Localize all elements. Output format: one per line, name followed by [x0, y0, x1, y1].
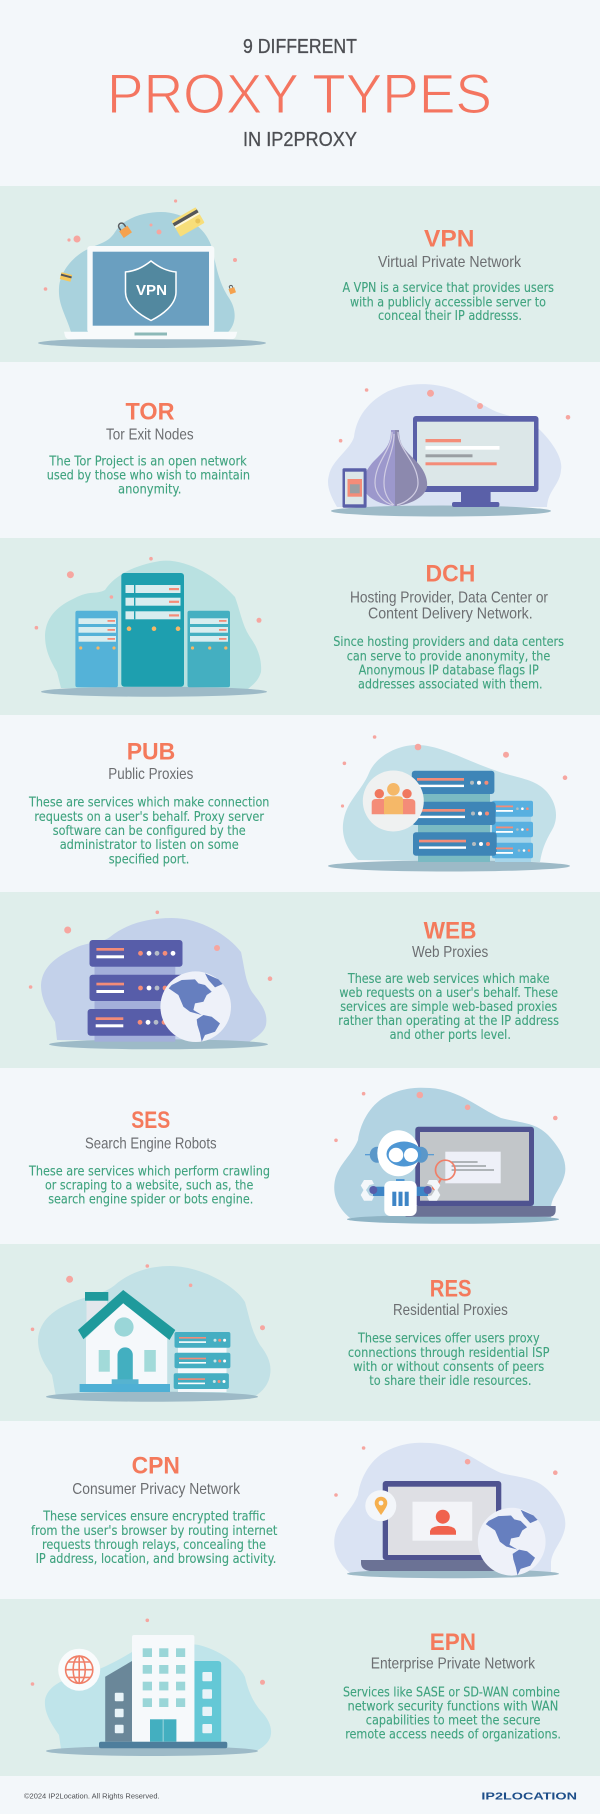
- text: TOR: Tor Exit Nodes: [106, 426, 194, 443]
- illustration: onion and monitor: [328, 384, 570, 516]
- text: CPN: Consumer Privacy Network: [72, 1481, 241, 1498]
- text: CPN: from the user's browser by routing internet: [31, 1524, 277, 1539]
- text: DCH: Content Delivery Network.: [368, 605, 533, 622]
- illustration: VPN laptop: VPN: [136, 282, 167, 299]
- text: PUB: requests on a user's behalf. Proxy server: [34, 810, 265, 825]
- title block: [107, 36, 492, 151]
- text: VPN: [342, 226, 554, 324]
- footer: [24, 1791, 577, 1802]
- panel: PUB: [0, 715, 600, 892]
- text: WEB: These are web services which make: [347, 972, 550, 987]
- text: EPN: remote access needs of organizations.: [345, 1728, 561, 1743]
- text: TOR: used by those who wish to maintain: [47, 468, 250, 483]
- text: RES: to share their idle resources.: [369, 1374, 532, 1389]
- text: SES: SES: [131, 1107, 170, 1134]
- text: PUB: software can be configured by the: [53, 824, 246, 839]
- title: proxy types: PROXY TYPES: [107, 62, 492, 125]
- text: SES: search engine spider or bots engine.: [48, 1193, 253, 1208]
- illustration: web proxy servers and globe: [29, 910, 272, 1049]
- text: EPN: Enterprise Private Network: [371, 1656, 536, 1673]
- illustration: VPN laptop: [38, 199, 266, 348]
- text: RES: These services offer users proxy: [357, 1332, 540, 1347]
- text: VPN: with a publicly accessible server to: [350, 295, 546, 310]
- illustration: data center servers: [35, 557, 267, 697]
- text: RES: connections through residential ISP: [348, 1346, 550, 1361]
- text: CPN: requests through relays, concealing the: [42, 1538, 266, 1553]
- panel: CPN: [0, 1421, 600, 1599]
- illustration: search robot and laptop: [334, 1088, 565, 1224]
- text: TOR: [47, 398, 250, 497]
- text: DCH: DCH: [426, 561, 475, 588]
- text: EPN: capabilities to meet the secure: [366, 1714, 540, 1729]
- text: PUB: Public Proxies: [108, 766, 193, 783]
- text: WEB: WEB: [424, 917, 476, 944]
- text: EPN: Services like SASE or SD-WAN combine: [343, 1685, 560, 1700]
- text: PUB: [28, 739, 269, 867]
- text: PUB: PUB: [127, 739, 175, 766]
- text: EPN: EPN: [430, 1629, 476, 1656]
- panel: SES: [0, 1068, 600, 1244]
- icon: globe: [478, 1508, 546, 1576]
- panel: TOR: [0, 362, 600, 538]
- text: WEB: web requests on a user's behalf. These: [339, 986, 558, 1001]
- text: VPN: A VPN is a service that provides users: [342, 281, 554, 296]
- title line: in ip2proxy: IN IP2PROXY: [243, 129, 357, 151]
- text: TOR: TOR: [126, 398, 175, 425]
- text: SES: These are services which perform crawling: [28, 1164, 270, 1179]
- logo: IP2Location: IP2LOCATION: [481, 1791, 577, 1802]
- text: WEB: services are simple web-based proxies: [340, 1000, 557, 1015]
- text: DCH: addresses associated with them.: [358, 678, 543, 693]
- title line: 9 different: 9 DIFFERENT: [243, 36, 357, 58]
- text: DCH: [333, 561, 564, 693]
- panel: RES: [0, 1244, 600, 1421]
- text: TOR: anonymity.: [118, 482, 181, 497]
- panel: EPN: [0, 1599, 600, 1776]
- copyright: ©2024 IP2Location. All Rights Reserved.: [24, 1792, 160, 1801]
- text: WEB: [338, 917, 559, 1043]
- text: WEB: rather than operating at the IP address: [338, 1014, 559, 1029]
- text: VPN: Virtual Private Network: [378, 254, 522, 271]
- text: DCH: Since hosting providers and data centers: [333, 635, 564, 650]
- text: DCH: can serve to provide anonymity, the: [347, 650, 550, 665]
- illustration: house and servers: [31, 1264, 271, 1402]
- text: WEB: Web Proxies: [412, 944, 488, 961]
- panel: WEB: [0, 892, 600, 1068]
- illustration: public proxy servers: [328, 735, 570, 872]
- text: RES: Residential Proxies: [393, 1302, 508, 1319]
- panel: DCH: [0, 538, 600, 715]
- icon: globe: [160, 971, 231, 1042]
- text: CPN: These services ensure encrypted traffic: [42, 1510, 266, 1525]
- text: VPN: VPN: [424, 226, 474, 253]
- illustration: office buildings: [31, 1618, 271, 1756]
- text: VPN: conceal their IP addresss.: [378, 309, 522, 324]
- text: DCH: Anonymous IP database flags IP: [359, 664, 539, 679]
- text: RES: [348, 1276, 550, 1389]
- panel: VPN: [0, 186, 600, 362]
- text: SES: [28, 1107, 270, 1208]
- text: RES: with or without consents of peers: [353, 1360, 544, 1375]
- text: CPN: CPN: [132, 1453, 180, 1480]
- text: PUB: These are services which make connection: [28, 796, 269, 811]
- text: DCH: Hosting Provider, Data Center or: [350, 589, 549, 606]
- text: SES: Search Engine Robots: [85, 1135, 217, 1152]
- text: WEB: and other ports level.: [390, 1028, 511, 1043]
- illustration: privacy laptop and globe: [334, 1443, 565, 1578]
- text: PUB: specified port.: [109, 852, 189, 867]
- text: RES: RES: [430, 1276, 472, 1303]
- text: CPN: [31, 1453, 277, 1567]
- text: PUB: administrator to listen on some: [60, 838, 239, 853]
- text: EPN: network security functions with WAN: [348, 1700, 558, 1715]
- text: SES: or scraping to a website, such as, the: [45, 1179, 253, 1194]
- text: CPN: IP address, location, and browsing activity.: [36, 1552, 276, 1567]
- text: TOR: The Tor Project is an open network: [49, 454, 247, 469]
- text: EPN: [343, 1629, 561, 1743]
